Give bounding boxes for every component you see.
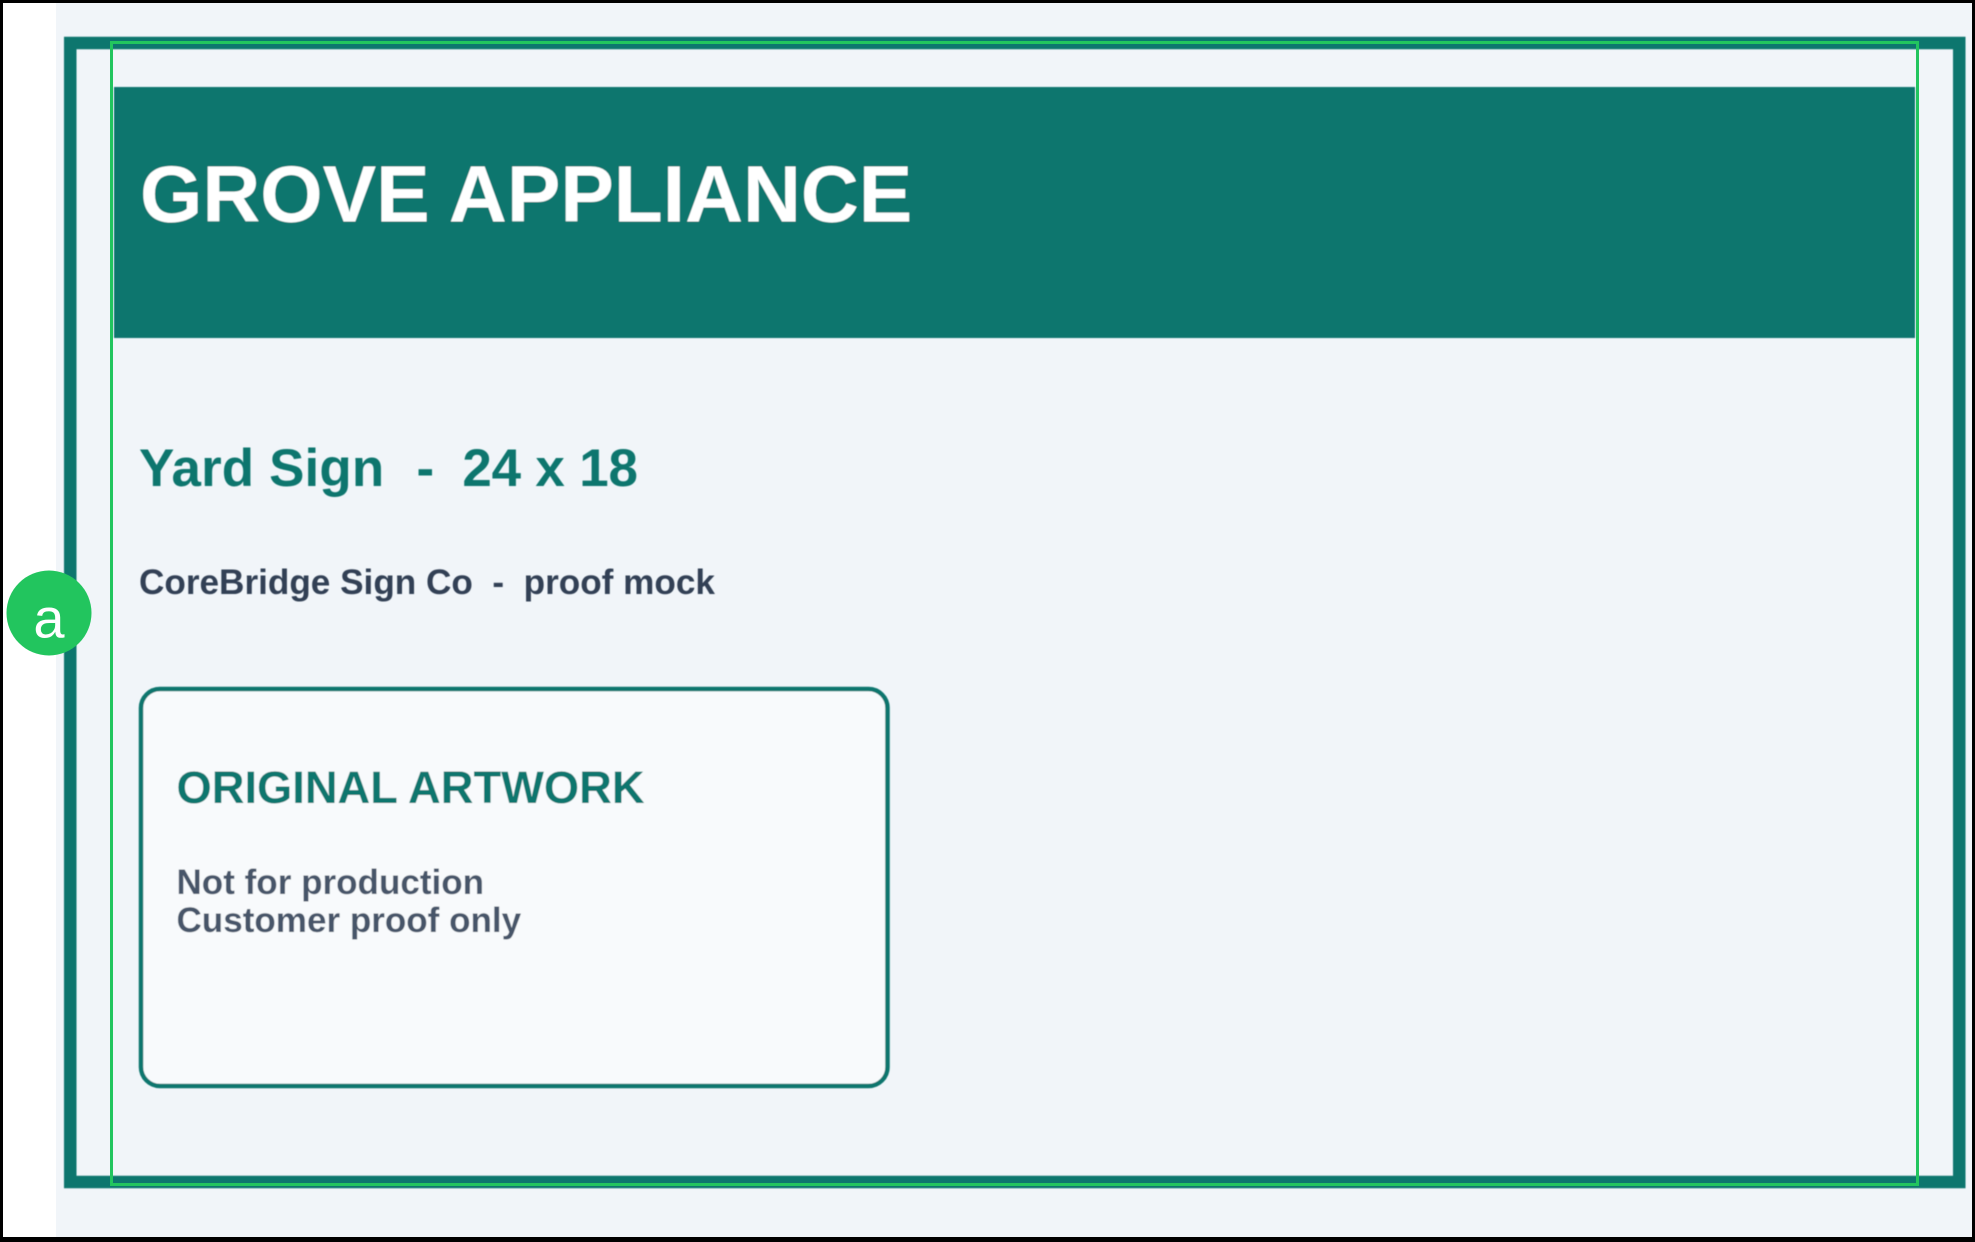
panel note text: Customer proof only [176, 901, 522, 940]
annotation marker a: a [33, 586, 65, 650]
annotation marker a [6, 570, 92, 656]
panel note text: Not for production [176, 863, 484, 902]
subtitle: product and size: Yard Sign - 24 x 18 [139, 439, 638, 498]
company line: CoreBridge Sign Co - proof mock [139, 563, 715, 602]
panel: original artwork notice [141, 689, 888, 1086]
title: GROVE APPLIANCE [140, 148, 912, 238]
header banner [114, 87, 1915, 338]
panel heading: ORIGINAL ARTWORK [176, 762, 645, 813]
